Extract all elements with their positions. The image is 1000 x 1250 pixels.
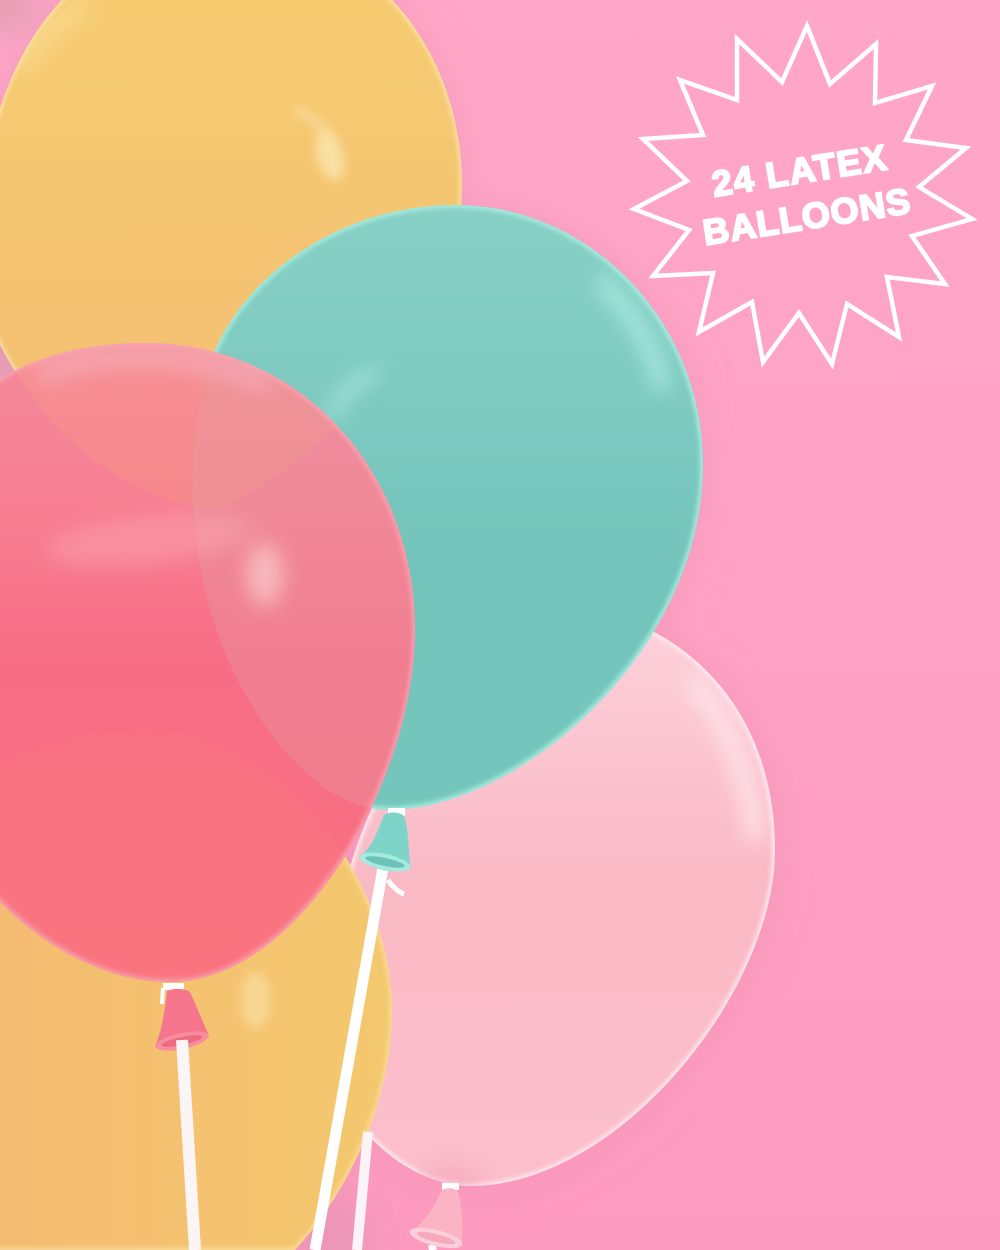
balloon: light pink (333, 630, 775, 1194)
starburst outline (634, 26, 972, 364)
balloon: coral red translucent (0, 343, 415, 982)
balloon: yellow upper (0, 0, 462, 370)
balloon shadows (0, 0, 775, 1250)
stick: teal balloon (315, 868, 404, 1250)
balloon: teal (193, 205, 703, 810)
stick: yellow lower balloon (357, 1132, 368, 1250)
balloon neck: pink (408, 1183, 464, 1250)
badge text: 24 LATEX (709, 136, 891, 205)
balloon neck: coral (154, 983, 210, 1054)
badge text (700, 136, 914, 253)
stick: coral balloon (182, 1040, 195, 1250)
starburst badge (634, 26, 972, 364)
badge text: BALLOONS (700, 180, 914, 253)
balloon: yellow lower (0, 856, 392, 1250)
balloon neck: teal (358, 808, 412, 875)
